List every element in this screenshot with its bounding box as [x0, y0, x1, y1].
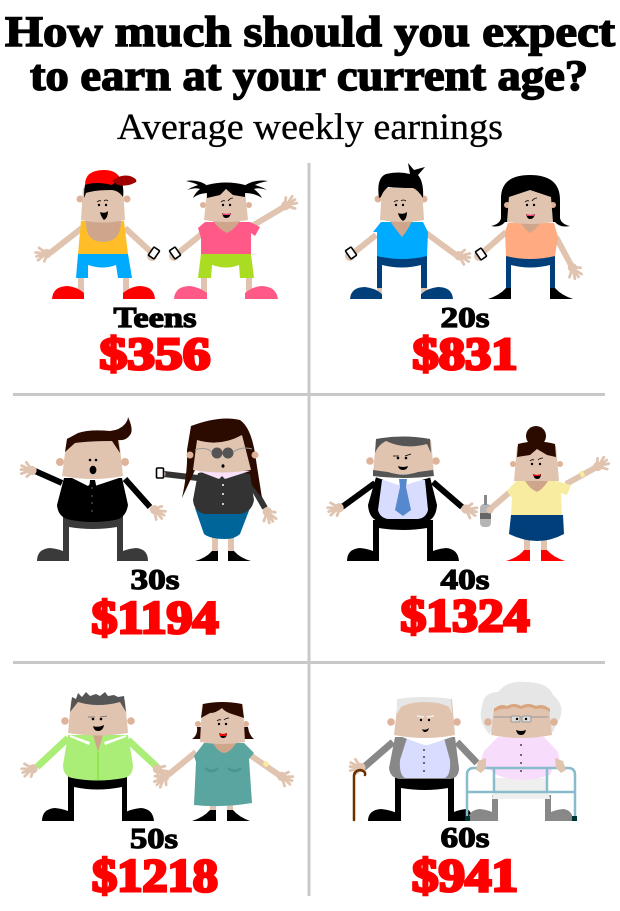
title [5, 9, 616, 100]
title: How much should you expect [5, 9, 616, 56]
icon: walking cane [354, 770, 365, 820]
panel: 50s [21, 692, 295, 902]
age label: 60s: 60s [440, 822, 490, 854]
amount: 50s: $1218 [92, 850, 218, 902]
panel: 20s [345, 163, 584, 379]
subtitle: Average weekly earnings [117, 107, 503, 148]
amount: 20s: $831 [412, 328, 518, 379]
amount: 60s: $941 [412, 850, 518, 902]
panel: 40s [327, 426, 611, 642]
amount: teens: $356 [100, 328, 210, 379]
age label: 40s: 40s [440, 564, 490, 596]
title: to earn at your current age? [30, 53, 588, 100]
age label: 30s: 30s [130, 564, 180, 596]
character: woman with bottle [480, 426, 611, 561]
amount: 30s: $1194 [92, 592, 218, 644]
character: man in blue tee [345, 163, 471, 299]
character: man in black suit [20, 417, 167, 561]
character: woman in orange top [474, 175, 584, 299]
character: old woman with walker [465, 682, 577, 821]
age label: 50s: 50s [130, 823, 178, 855]
icon: walking frame [467, 768, 575, 820]
character: man with tie [327, 436, 479, 561]
age label: teens: Teens [114, 302, 196, 334]
character: woman with sunglasses [156, 418, 278, 561]
character: woman in teal dress [152, 702, 295, 821]
character: man in green shirt [21, 692, 170, 821]
character: teen girl [169, 181, 299, 299]
panel: teens [35, 170, 299, 379]
panel: 60s [349, 682, 577, 902]
character: teen boy [35, 170, 160, 299]
panel: 30s [20, 417, 278, 644]
amount: 40s: $1324 [400, 590, 530, 642]
character: old man with cane [349, 697, 477, 821]
age label: 20s: 20s [440, 302, 490, 334]
